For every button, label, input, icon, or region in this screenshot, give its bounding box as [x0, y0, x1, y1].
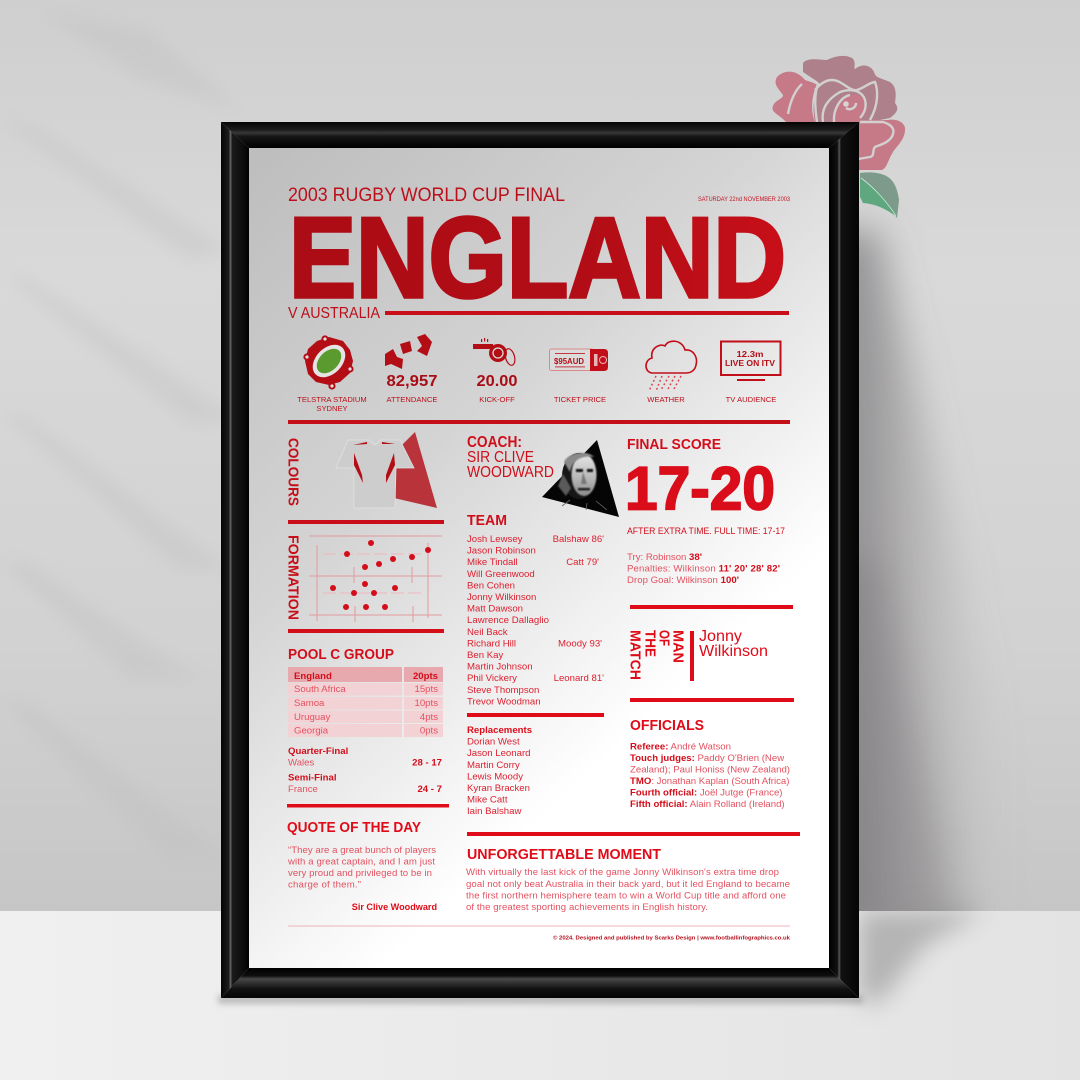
officials heading: OFFICIALS — [630, 718, 704, 734]
replacements: Kyran Bracken — [467, 783, 530, 794]
man of the match heading — [626, 630, 686, 680]
panel: formation — [284, 535, 442, 622]
moment heading: UNFORGETTABLE MOMENT — [467, 847, 661, 863]
rose right petal — [858, 120, 905, 170]
icon: rain cloud — [646, 341, 697, 391]
shirt trim — [353, 442, 395, 483]
match title: 2003 RUGBY WORLD CUP FINAL — [288, 184, 565, 206]
rose centre — [832, 94, 867, 122]
attendance label: ATTENDANCE — [387, 395, 437, 404]
panel: team — [467, 513, 604, 817]
score heading: FINAL SCORE — [627, 437, 721, 453]
substitutions: Balshaw 86' — [553, 534, 604, 545]
table rows: England — [294, 671, 332, 682]
coach name: COACH: — [467, 434, 522, 451]
home shirt — [336, 440, 414, 508]
rose emblem on the wall — [772, 56, 905, 218]
poster header — [288, 184, 790, 322]
quote body: “They are a great bunch of players — [288, 845, 436, 856]
replacements: Dorian West — [467, 737, 520, 748]
poster paper — [249, 148, 829, 968]
player name — [699, 628, 768, 660]
stadium label: TELSTRA STADIUM — [297, 395, 367, 404]
man of the match heading: MATCH — [626, 630, 642, 680]
stats row — [297, 334, 780, 413]
knockout results: Quarter-Final — [288, 746, 348, 757]
quote heading: QUOTE OF THE DAY — [287, 820, 421, 836]
tv label: TV AUDIENCE — [726, 395, 776, 404]
starting line-up: Lawrence Dallaglio — [467, 615, 549, 626]
match date: SATURDAY 22nd NOVEMBER 2003 — [698, 196, 790, 203]
man of the match heading: THE — [642, 630, 658, 657]
officials list: TMO: Jonathan Kaplan (South Africa) — [630, 776, 789, 787]
coach portrait — [542, 440, 619, 517]
substitutions: Moody 93' — [558, 638, 602, 649]
quote body: very proud and privileged to be in — [288, 868, 432, 879]
attendance figure: 82,957 — [386, 373, 438, 390]
rose back petals — [803, 56, 897, 122]
knockout results: France — [288, 784, 318, 795]
substitutions: Leonard 81' — [554, 673, 604, 684]
panel: man of the match — [626, 628, 768, 681]
panel: pool table — [288, 647, 443, 795]
score: 17-20 — [625, 454, 775, 522]
ticket label: TICKET PRICE — [554, 395, 606, 404]
stadium label: SYDNEY — [316, 404, 348, 413]
picture frame — [221, 122, 859, 998]
starting line-up — [467, 534, 549, 707]
scorers: Drop Goal: Wilkinson 100' — [627, 575, 739, 586]
rose left petals — [772, 72, 817, 122]
player name: Jonny — [699, 628, 742, 645]
knockout results: Semi-Final — [288, 772, 337, 784]
moment body: of the greatest sporting achievements in English history. — [466, 902, 708, 913]
table rows: 20pts — [413, 671, 438, 682]
table rows: 10pts — [415, 698, 438, 709]
starting line-up: Phil Vickery — [467, 673, 517, 684]
icon: ticket — [550, 349, 608, 371]
opponent: V AUSTRALIA — [288, 305, 381, 322]
coach name: WOODWARD — [467, 464, 554, 481]
replacements: Jason Leonard — [467, 748, 530, 759]
man of the match heading: OF — [656, 630, 672, 646]
officials list: Touch judges: Paddy O'Brien (New — [630, 753, 784, 764]
starting line-up: Trevor Woodman — [467, 696, 541, 707]
starting line-up: Mike Tindall — [467, 557, 518, 568]
player name: Wilkinson — [699, 643, 768, 660]
officials list: Fifth official: Alain Rolland (Ireland) — [630, 799, 785, 810]
weather label: WEATHER — [647, 395, 685, 404]
kick-off label: KICK-OFF — [479, 395, 515, 404]
icon: attendance pieces — [385, 334, 432, 369]
formation heading: FORMATION — [284, 535, 300, 620]
panel: officials — [630, 718, 790, 810]
quote body: with a great captain, and I am just — [287, 856, 435, 868]
panel: unforgettable moment — [466, 847, 790, 913]
panel: colours — [284, 432, 437, 508]
knockout results — [288, 746, 442, 795]
player dots — [330, 540, 431, 610]
table rows: Georgia — [294, 726, 329, 736]
icon: whistle — [473, 338, 517, 366]
knockout results: 28 - 17 — [412, 758, 442, 768]
icon: television: 12.3m — [736, 349, 764, 359]
starting line-up: Jason Robinson — [467, 546, 536, 557]
starting line-up: Jonny Wilkinson — [467, 592, 536, 603]
table rows: South Africa — [294, 684, 346, 695]
starting line-up: Josh Lewsey — [467, 534, 523, 545]
replacements: Replacements — [467, 725, 532, 736]
panel: final score — [625, 437, 785, 586]
pitch markings — [309, 536, 442, 622]
replacements: Iain Balshaw — [467, 806, 521, 817]
officials list: Zealand); Paul Honiss (New Zealand) — [630, 764, 790, 776]
kick-off figure: 20.00 — [476, 373, 518, 390]
panel: quote — [287, 820, 437, 912]
rose leaf — [860, 172, 899, 218]
moment body — [466, 867, 790, 913]
starting line-up: Martin Johnson — [467, 662, 533, 673]
panel: coach — [467, 434, 619, 517]
knockout results: Wales — [288, 758, 315, 768]
moment body: the first northern hemisphere team to win a World Cup title and afford one — [466, 890, 786, 902]
starting line-up: Matt Dawson — [467, 604, 523, 615]
moment body: With virtually the last kick of the game Jonny Wilkinson's extra time drop — [466, 867, 779, 878]
scorers: Try: Robinson 38' — [627, 552, 702, 563]
frame shadow on wall and floor — [218, 230, 1040, 1004]
replacements — [467, 725, 532, 817]
replacements: Lewis Moody — [467, 771, 523, 782]
scorers: Penalties: Wilkinson 11' 20' 28' 82' — [627, 564, 780, 575]
quote attribution: Sir Clive Woodward — [352, 902, 437, 912]
quote body: charge of them.” — [288, 880, 361, 890]
table rows: Samoa — [294, 698, 325, 709]
man of the match heading: MAN — [670, 630, 686, 663]
coach name — [467, 434, 554, 481]
footer credit: © 2024. Designed and published by Scarks Design | www.footballinfographics.co.uk — [553, 934, 790, 942]
table rows: 0pts — [420, 726, 438, 736]
officials list: Referee: André Watson — [630, 742, 731, 752]
colours heading: COLOURS — [284, 438, 300, 506]
icon: ticket: $95AUD — [554, 357, 584, 366]
starting line-up: Richard Hill — [467, 638, 516, 649]
coach name: SIR CLIVE — [467, 449, 534, 466]
icon: television — [721, 342, 780, 381]
moment body: goal not only beat Australia in their back yard, but it led England to became — [466, 879, 790, 890]
quote body — [287, 845, 436, 890]
scorers — [627, 552, 780, 586]
substitutions — [553, 534, 604, 684]
starting line-up: Steve Thompson — [467, 685, 539, 696]
substitutions: Catt 79' — [566, 557, 599, 568]
pool heading: POOL C GROUP — [288, 647, 394, 663]
icon: television: LIVE ON ITV — [725, 358, 775, 368]
starting line-up: Ben Kay — [467, 650, 503, 661]
knockout results: 24 - 7 — [417, 784, 442, 795]
table rows: 4pts — [420, 712, 438, 723]
table rows: Uruguay — [294, 712, 330, 723]
team name: ENGLAND — [289, 195, 786, 322]
starting line-up: Neil Back — [467, 627, 508, 638]
icon: stadium — [304, 336, 353, 389]
team heading: TEAM — [467, 513, 507, 529]
replacements: Mike Catt — [467, 795, 508, 806]
table rows — [288, 667, 443, 737]
alternate shirt — [393, 432, 437, 508]
officials list: Fourth official: Joël Jutge (France) — [630, 788, 782, 798]
starting line-up: Will Greenwood — [467, 569, 535, 580]
rose petal lines — [788, 76, 893, 159]
replacements: Martin Corry — [467, 760, 520, 771]
score note: AFTER EXTRA TIME. FULL TIME: 17-17 — [627, 526, 785, 536]
floor — [0, 911, 1080, 1080]
officials list — [630, 742, 790, 810]
table rows: 15pts — [415, 684, 438, 695]
starting line-up: Ben Cohen — [467, 580, 515, 591]
